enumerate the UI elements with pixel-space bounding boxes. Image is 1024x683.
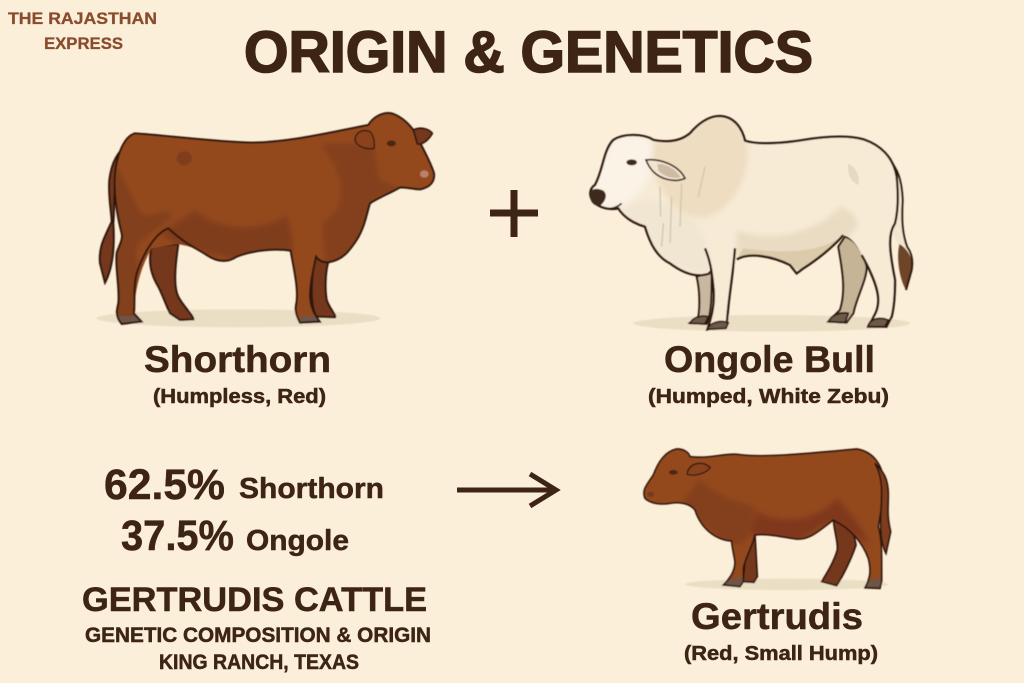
body outline [644,449,884,588]
ear [646,160,685,180]
spot [177,151,192,165]
arrow [457,474,556,506]
far front leg [742,535,757,582]
genetic percentages: 37.5% [121,512,234,560]
hooves [707,321,728,329]
dewlap wrinkles [660,167,705,247]
body outline [590,116,898,329]
nose [647,492,654,497]
eye [669,470,678,475]
watermark: The Rajasthan Express: EXPRESS [44,34,123,53]
genetic percentages: Ongole [246,525,349,557]
caption: Gertrudis cattle [82,581,431,674]
far front leg [312,257,335,317]
body shading [587,116,859,277]
body outline [115,113,434,324]
ear inner [657,164,681,178]
tail [888,157,912,290]
far hind leg [828,237,867,323]
label: Shorthorn: (Humpless, Red) [153,386,326,408]
label: Ongole Bull: Ongole Bull [664,339,875,380]
tail [100,141,135,283]
body shading [110,143,400,333]
caption: Gertrudis cattle: GERTRUDIS CATTLE [82,581,427,619]
illustration: Shorthorn bull [97,113,434,333]
ear [687,463,710,475]
title: ORIGIN & GENETICS [244,20,813,85]
caption: Gertrudis cattle: KING RANCH, TEXAS [159,651,359,674]
far front leg [690,272,712,324]
plus sign [490,190,538,237]
watermark: The Rajasthan Express [8,9,157,53]
label: Ongole Bull: (Humped, White Zebu) [648,386,889,408]
far hind leg [822,518,856,586]
ear (near) [355,131,374,149]
body [644,449,884,588]
eye and nose [387,140,396,146]
genetic percentages [104,461,384,560]
mouth [600,203,622,209]
far hind leg [150,244,193,320]
nose [590,189,606,206]
body [590,116,898,329]
body shading [680,478,882,590]
watermark: The Rajasthan Express: THE RAJASTHAN [8,9,157,28]
illustration: Gertrudis calf [644,449,891,590]
tail [875,463,891,553]
label: Gertrudis: (Red, Small Hump) [684,643,878,665]
label: Shorthorn: Shorthorn [144,339,331,380]
label: Gertrudis: Gertrudis [691,596,863,637]
body [115,113,434,324]
label: Ongole Bull [648,339,889,408]
eye [626,159,637,165]
label: Gertrudis [684,596,878,665]
genetic percentages: Shorthorn [239,473,384,505]
caption: Gertrudis cattle: GENETIC COMPOSITION & ORIGIN [85,624,431,647]
label: Shorthorn [144,339,331,408]
ear (far) [413,128,432,144]
illustration: Ongole bull [587,116,912,332]
genetic percentages: 62.5% [104,461,225,509]
